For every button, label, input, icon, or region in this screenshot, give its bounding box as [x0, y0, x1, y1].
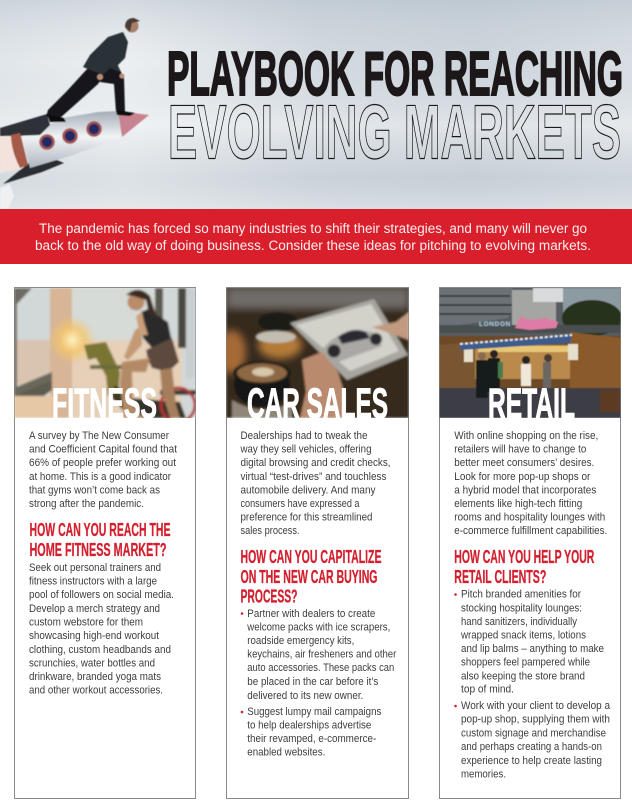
retail question heading [454, 547, 594, 587]
intro banner [0, 209, 632, 264]
fitness advice text: Seek out personal trainers and [29, 562, 161, 574]
fitness advice text: fitness instructors with a large [29, 576, 157, 588]
rocket exhaust [0, 135, 26, 173]
jacket [83, 32, 128, 75]
sign lettering: LONDON [479, 321, 511, 328]
car sales intro text: way they sell vehicles, offering [240, 444, 372, 456]
retail advice bullets: stocking hospitality lounges: [461, 602, 582, 614]
car sales question heading [240, 547, 382, 606]
car sales question heading: PROCESS? [240, 586, 298, 606]
car sales question heading: HOW CAN YOU CAPITALIZE [240, 547, 382, 567]
retail advice bullets: experience to help create lasting [461, 755, 602, 767]
rider [124, 325, 142, 360]
fitness intro text [29, 430, 177, 510]
retail advice bullets [454, 588, 610, 781]
retail advice bullets: also keeping the store brand [461, 670, 585, 682]
retail intro text: rooms and hospitality lounges with [454, 512, 605, 524]
panel: car sales [218, 287, 409, 798]
fitness advice text: Develop a merch strategy and [29, 603, 160, 615]
rocket top fin [0, 114, 50, 136]
retail intro text: elements like high-tech fitting [454, 498, 582, 510]
rocket bottom fin [3, 158, 64, 184]
car sales intro text: sales process. [240, 525, 300, 537]
car sales advice bullets: Suggest lumpy mail campaigns [247, 706, 381, 718]
fitness advice text: pool of followers on social media. [29, 589, 174, 601]
car sales advice bullets: enabled websites. [247, 746, 325, 758]
car sales intro text: consumers have expressed a [240, 498, 360, 510]
hands [97, 74, 103, 80]
retail advice bullets: and perhaps creating a hands-on [461, 741, 602, 753]
title [167, 40, 623, 176]
car sales advice bullets: keychains, air fresheners and other [247, 648, 397, 660]
retail advice bullets: and lip balms – anything to make [461, 643, 604, 655]
car sales intro text: preference for this streamlined [240, 512, 373, 524]
illustration: businessman riding a rocket [0, 18, 149, 209]
fitness advice text [29, 562, 174, 696]
fitness advice text: scrunchies, water bottles and [29, 658, 155, 670]
retail intro text: e-commerce fulfillment capabilities. [454, 525, 607, 537]
retail advice bullets: Pitch branded amenities for [461, 588, 581, 600]
retail advice bullets: hand sanitizers, individually [461, 616, 578, 628]
retail advice bullets: Work with your client to develop a [461, 700, 610, 712]
car sales advice bullets: their revamped, e-commerce- [247, 733, 377, 745]
retail advice bullets: memories. [461, 769, 506, 781]
fitness advice text: showcasing high-end workout [29, 630, 159, 642]
fitness intro text: A survey by The New Consumer [29, 430, 169, 442]
car sales advice bullets: to help dealerships advertise [247, 720, 371, 732]
bike [84, 342, 120, 396]
fitness intro text: that gyms won’t come back as [29, 484, 160, 496]
businessman [46, 18, 140, 122]
label: fitness: FITNESS [52, 380, 157, 428]
car sales question heading: ON THE NEW CAR BUYING [240, 567, 378, 587]
fitness advice text: clothing, custom headbands and [29, 644, 171, 656]
fitness advice text: and other workout accessories. [29, 684, 163, 696]
car sales advice bullets: welcome packs with ice scrapers, [246, 622, 390, 634]
intro text: back to the old way of doing business. Consider these ideas for pitching to evolving markets. [35, 238, 591, 254]
car sales intro text [240, 430, 390, 537]
header background [0, 0, 632, 209]
retail advice bullets: pop-up shop, supplying them with [461, 714, 610, 726]
retail intro text: a hybrid model that incorporates [454, 484, 596, 496]
panel: fitness [14, 287, 196, 798]
retail intro text [454, 430, 607, 537]
fitness intro text: strong after the pandemic. [29, 498, 144, 510]
car sales advice bullets: Partner with dealers to create [247, 608, 375, 620]
retail advice bullets: shoppers feel pampered while [461, 656, 590, 668]
label: car sales: CAR SALES [247, 380, 388, 428]
fitness intro text: at home. This is a good indicator [29, 471, 171, 483]
retail question heading: RETAIL CLIENTS? [454, 567, 546, 587]
panel: retail [439, 287, 622, 798]
retail intro text: better meet consumers’ desires. [454, 457, 594, 469]
rocket hull [22, 111, 122, 168]
car sales advice bullets: be placed in the car before it’s [247, 676, 378, 688]
fitness question heading: HOW CAN YOU REACH THE [30, 520, 170, 540]
front leg [98, 66, 125, 112]
fitness advice text: drinkware, branded yoga mats [29, 671, 161, 683]
photo: pop-up shop in London [439, 287, 622, 418]
car sales advice bullets [241, 608, 397, 758]
retail intro text: With online shopping on the rise, [454, 430, 598, 442]
photo: woman on exercise bike [14, 287, 196, 422]
intro text [35, 221, 591, 254]
head [126, 20, 138, 32]
car sales intro text: automobile delivery. And many [240, 484, 376, 496]
fitness question heading [30, 520, 170, 560]
rocket portholes [40, 122, 100, 148]
fitness intro text: and Coefficient Capital found that [29, 444, 177, 456]
photo: tablet showing a car and coffee [218, 287, 409, 418]
fitness intro text: 66% of people prefer working out [29, 457, 176, 469]
rocket smoke [0, 184, 14, 209]
car sales advice bullets: roadside emergency kits, [247, 635, 354, 647]
shoes [116, 110, 135, 116]
car sales intro text: virtual “test-drives” and touchless [240, 471, 386, 483]
rocket engine ring [11, 133, 28, 168]
car sales advice bullets: auto accessories. These packs can [247, 662, 394, 674]
retail advice bullets: wrapped snack items, lotions [460, 630, 586, 642]
car sales advice bullets: delivered to its new owner. [247, 690, 363, 702]
car sales intro text: digital browsing and credit checks, [240, 457, 390, 469]
fitness question heading: HOME FITNESS MARKET? [30, 540, 166, 560]
car sales intro text: Dealerships had to tweak the [240, 430, 368, 442]
rocket nose cone [118, 111, 149, 137]
back leg [46, 68, 106, 118]
intro text: The pandemic has forced so many industries to shift their strategies, and many will never go [39, 221, 587, 237]
retail advice bullets: top of mind. [461, 684, 514, 696]
retail intro text: retailers will have to change to [454, 444, 586, 456]
retail intro text: Look for more pop-up shops or [454, 471, 591, 483]
retail advice bullets: custom signage and merchandise [461, 728, 606, 740]
fitness advice text: custom webstore for them [29, 616, 143, 628]
